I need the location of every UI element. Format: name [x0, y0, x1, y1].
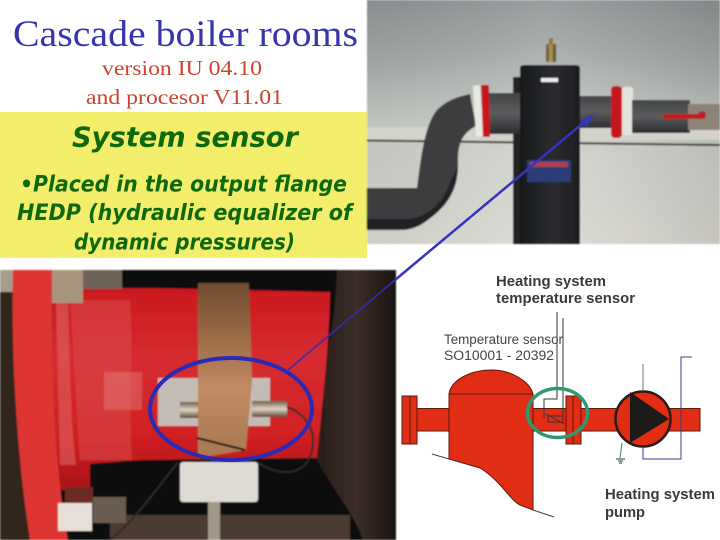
left pipe — [487, 93, 523, 134]
label: heating system temperature sensor: temperature sensor — [496, 291, 635, 307]
air vent — [546, 44, 556, 62]
subtitle: and procesor V11.01 — [86, 85, 283, 109]
label: heating system pump — [605, 487, 715, 521]
heading: system sensor: System sensor — [72, 120, 300, 154]
vessel label — [541, 78, 558, 82]
floor — [110, 515, 350, 540]
subtitle: version IU 04.10 — [102, 56, 262, 80]
sensor symbol and leads — [544, 312, 564, 424]
text block: sensor placement: dynamic pressures) — [74, 230, 295, 256]
label: heating system temperature sensor — [496, 274, 635, 307]
top left bolt head — [0, 270, 16, 292]
label: heating system temperature sensor: Heating system — [496, 274, 606, 290]
elbow pipe — [367, 94, 476, 230]
cast iron housing — [317, 270, 396, 540]
vessel — [520, 65, 580, 244]
photo: sensor strapped to red flange — [0, 270, 396, 540]
label: heating system pump: Heating system — [605, 487, 715, 503]
red flange — [13, 270, 68, 540]
label: heating system pump: pump — [605, 505, 645, 521]
pipe — [417, 408, 700, 431]
vessel shadow — [513, 77, 525, 244]
diagram: heating circuit — [402, 274, 715, 521]
title: Cascade boiler rooms — [13, 14, 358, 55]
arrow: sensor to equalizer flange — [288, 114, 594, 370]
text block: sensor placement: HEDP (hydraulic equalizer of — [17, 201, 354, 226]
label: temperature sensor part number: SO10001 - 20392 — [444, 348, 554, 363]
red body — [52, 288, 330, 490]
left edge — [0, 270, 30, 540]
valve — [688, 104, 720, 130]
right pipe — [577, 96, 613, 128]
callout: blue ellipse around sensor — [150, 358, 312, 460]
bottom bolt — [65, 487, 93, 503]
text block: sensor placement: •Placed in the output flange — [20, 172, 347, 198]
equalizer vessel — [449, 370, 533, 510]
photo: hydraulic equalizer on wall — [367, 0, 720, 244]
vessel data plate — [527, 160, 571, 182]
label: temperature sensor part number: Temperature sensor — [444, 332, 564, 347]
panel: system sensor description — [0, 112, 367, 258]
bracket — [180, 462, 258, 502]
callout: green circle on sensor — [528, 388, 588, 438]
right flange — [566, 396, 581, 444]
subtitle — [86, 56, 283, 109]
sensor rod — [180, 402, 198, 418]
text block: sensor placement — [17, 172, 354, 256]
label: temperature sensor part number — [444, 332, 564, 363]
copper strap — [198, 283, 252, 458]
left flange — [402, 396, 417, 444]
pump — [616, 392, 670, 446]
sensor wire — [258, 407, 313, 472]
silver patch — [158, 378, 270, 426]
pump wiring — [616, 357, 692, 463]
top bolt — [52, 270, 83, 303]
highlights on body — [56, 300, 76, 465]
